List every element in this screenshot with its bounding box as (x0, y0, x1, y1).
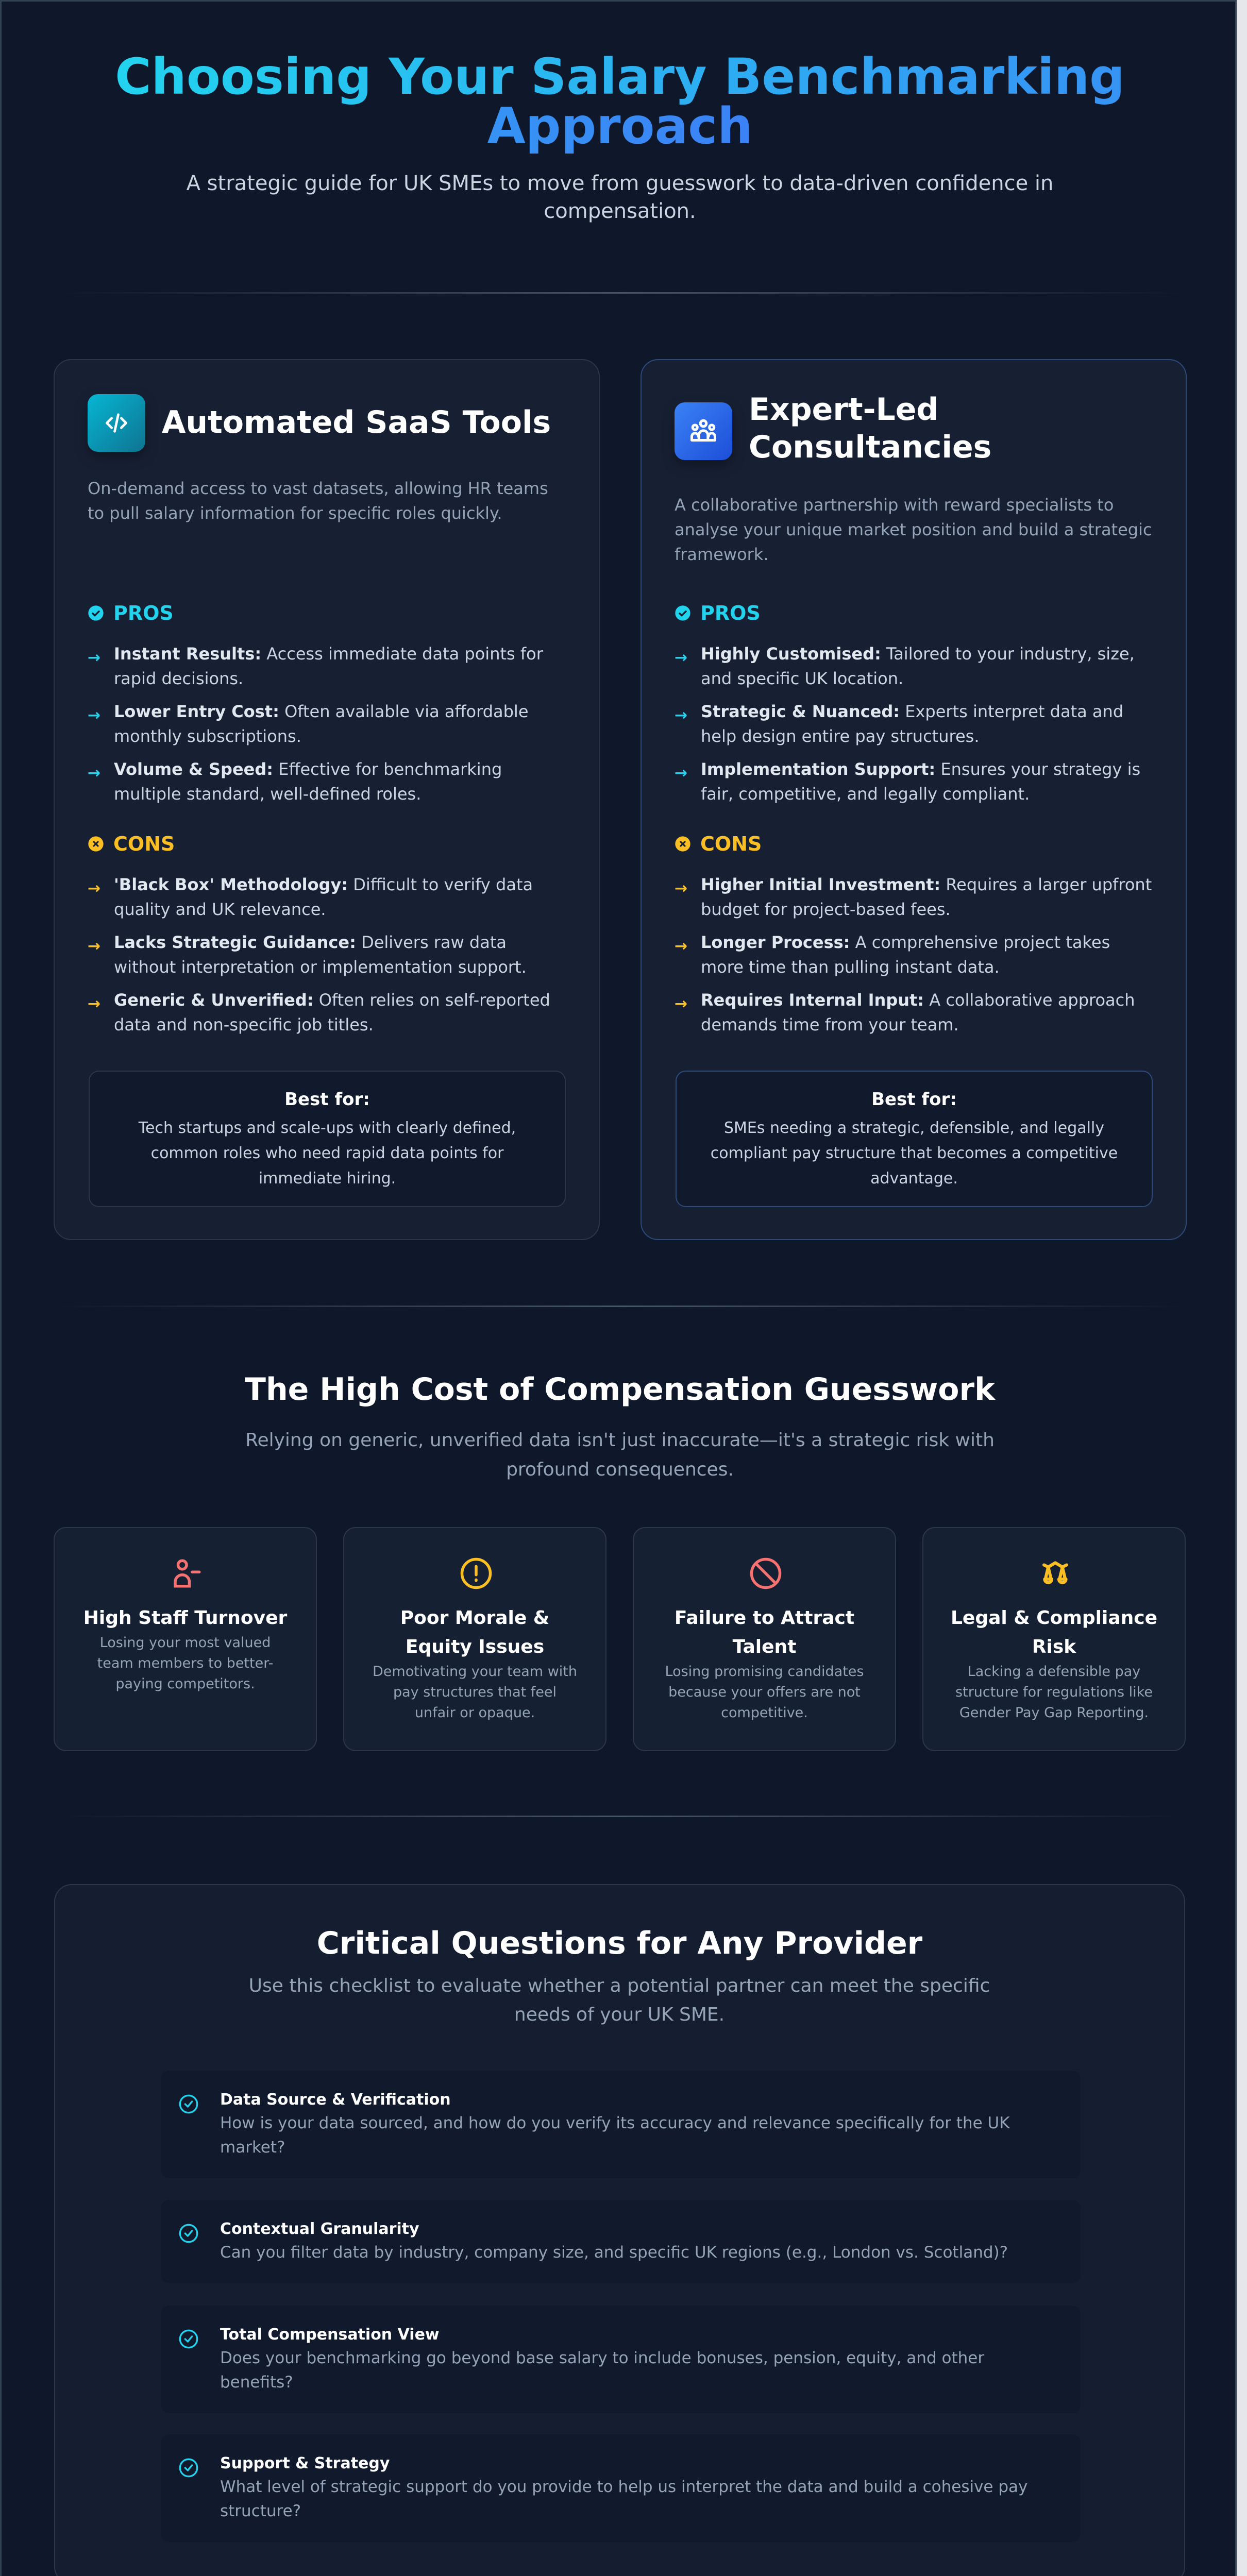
pros list: → (675, 706, 687, 724)
card title: Expert-Led (749, 392, 938, 428)
risk card: talent (633, 1527, 896, 1751)
cons list: → (675, 879, 687, 897)
pros list: PROS (113, 602, 174, 624)
best for box: Tech startups and scale-ups with clearly defined, (139, 1119, 516, 1137)
risk card: morale (343, 1527, 606, 1751)
cons list: Requires Internal Input: A collaborative approach demands time from your team. (701, 990, 1135, 1035)
cons list (675, 833, 1152, 1035)
best for box: SMEs needing a strategic, defensible, and legally compliant pay structure that becomes a competitive advantage. (711, 1119, 1118, 1188)
subheading: high cost: Relying on generic, unverified data isn't just inaccurate—it's a strategic risk with profound consequences. (245, 1430, 995, 1480)
risk card: talent: Losing promising candidates (665, 1664, 864, 1680)
cons list: Lacks Strategic Guidance: Delivers raw data without interpretation or implementation support. (114, 933, 527, 977)
cons list: → (88, 995, 100, 1013)
risk card: talent: because your offers are not (668, 1684, 861, 1700)
risk card: morale: pay structures that feel (393, 1684, 557, 1700)
checklist item: granularity: Contextual Granularity (220, 2220, 419, 2238)
pros list: Lower Entry Cost: Often available via affordable monthly subscriptions. (114, 702, 529, 746)
pros list (88, 602, 543, 804)
best for box: Best for: (284, 1089, 370, 1110)
best for box: common roles who need rapid data points for (151, 1144, 503, 1162)
pros list: Highly Customised: Tailored to your industry, size, and specific UK location. (701, 644, 1135, 688)
checklist item: data source (161, 2071, 1081, 2178)
description: On-demand access to vast datasets, allowing HR teams to pull salary information for specific roles quickly. (88, 479, 548, 523)
best for box (676, 1071, 1153, 1207)
checklist item: support: structure? (220, 2502, 301, 2520)
checklist item: support: Support & Strategy (220, 2454, 390, 2472)
risk card: legal: Lacking a defensible pay (968, 1664, 1140, 1680)
cons list (88, 833, 550, 1035)
title (115, 48, 1125, 155)
risk card: talent: competitive. (721, 1705, 808, 1721)
risk card: talent: Failure to Attract (675, 1607, 854, 1629)
risk card: talent: Talent (733, 1636, 796, 1657)
title: Choosing Your Salary Benchmarking (115, 48, 1125, 106)
subtitle: A strategic guide for UK SMEs to move from guesswork to data-driven confidence in (187, 172, 1053, 195)
cons list: → (88, 937, 100, 955)
risk card: turnover: High Staff Turnover (83, 1607, 287, 1629)
risk card: legal: Gender Pay Gap Reporting. (959, 1705, 1149, 1721)
checklist item: data source: Data Source & Verification (220, 2091, 451, 2109)
pros list: Implementation Support: Ensures your strategy is fair, competitive, and legally compliant. (701, 759, 1140, 804)
card title: Automated SaaS Tools (162, 404, 551, 440)
best for box: Best for: (871, 1089, 957, 1110)
best for box: immediate hiring. (259, 1170, 396, 1188)
description: A collaborative partnership with reward specialists to analyse your unique market position and build a strategic framework. (675, 495, 1152, 564)
risk card: morale: Poor Morale & (400, 1607, 549, 1629)
cons list: → (675, 995, 687, 1013)
risk card: turnover: Losing your most valued (100, 1635, 271, 1651)
cons list: CONS (700, 833, 762, 855)
card title: Consultancies (749, 429, 991, 465)
pros list: Strategic & Nuanced: Experts interpret data and help design entire pay structures. (701, 702, 1123, 746)
cons list: → (675, 937, 687, 955)
icon: users (675, 402, 732, 460)
checklist item: total compensation (161, 2306, 1081, 2413)
checklist item: granularity (161, 2200, 1081, 2283)
cons list: Generic & Unverified: Often relies on self-reported data and non-specific job titles. (114, 990, 550, 1035)
pros list: Instant Results: Access immediate data points for rapid decisions. (114, 644, 543, 688)
cons list: → (88, 879, 100, 897)
pros list: → (675, 649, 687, 667)
risk card: morale: unfair or opaque. (415, 1705, 535, 1721)
panel: critical questions (54, 1884, 1185, 2576)
risk card: turnover (54, 1527, 317, 1751)
panel: expert-led consultancies (641, 359, 1187, 1240)
pros list: → (88, 649, 100, 667)
risk card: turnover: paying competitors. (115, 1676, 255, 1692)
pros list: → (88, 764, 100, 782)
risk card: turnover: team members to better- (97, 1655, 273, 1671)
risk card: morale: Demotivating your team with (373, 1664, 577, 1680)
icon: user minus (174, 1559, 201, 1588)
cons list: Higher Initial Investment: Requires a larger upfront budget for project-based fees. (701, 875, 1152, 919)
pros list: → (675, 764, 687, 782)
checklist item: support (161, 2434, 1081, 2542)
pros list: Volume & Speed: Effective for benchmarking multiple standard, well-defined roles. (114, 759, 502, 804)
checklist item: data source: market? (220, 2138, 285, 2157)
pros list (675, 602, 1140, 804)
icon: alert (461, 1558, 492, 1589)
checklist item: total compensation: Does your benchmarking go beyond base salary to include bonuses, pension, equity, and other (220, 2349, 984, 2367)
risk card: legal: Risk (1032, 1636, 1076, 1657)
title: Approach (487, 97, 753, 155)
pros list: PROS (700, 602, 761, 624)
subtitle: compensation. (544, 199, 696, 223)
checklist item: total compensation: Total Compensation View (220, 2326, 440, 2344)
risk card: legal: Legal & Compliance (951, 1607, 1157, 1629)
cons list: CONS (113, 833, 175, 855)
cons list: Longer Process: A comprehensive project takes more time than pulling instant data. (701, 933, 1110, 977)
pros list: → (88, 706, 100, 724)
heading: critical questions: Critical Questions for Any Provider (317, 1925, 922, 1961)
cons list: 'Black Box' Methodology: Difficult to verify data quality and UK relevance. (114, 875, 533, 919)
risk card: legal: structure for regulations like (955, 1684, 1153, 1700)
risk card: legal (922, 1527, 1186, 1751)
icon: scales (1042, 1561, 1068, 1584)
checklist item: total compensation: benefits? (220, 2373, 293, 2392)
card title (749, 392, 991, 465)
risk card: morale: Equity Issues (406, 1636, 544, 1657)
icon: ban (750, 1558, 781, 1589)
panel: automated saas tools (54, 359, 600, 1240)
subheading: checklist: Use this checklist to evaluate whether a potential partner can meet the specific needs of your UK SME. (249, 1975, 990, 2025)
best for box (89, 1071, 566, 1207)
checklist item: data source: How is your data sourced, and how do you verify its accuracy and relevance specifically for the UK (220, 2114, 1010, 2132)
checklist item: granularity: Can you filter data by industry, company size, and specific UK regions (e.g., London vs. Scotland)? (220, 2243, 1008, 2262)
checklist item: support: What level of strategic support do you provide to help us interpret the data and build a cohesive pay (220, 2478, 1027, 2496)
subtitle (187, 172, 1053, 223)
icon: code (88, 394, 145, 452)
heading: high cost: The High Cost of Compensation Guesswork (245, 1371, 995, 1408)
